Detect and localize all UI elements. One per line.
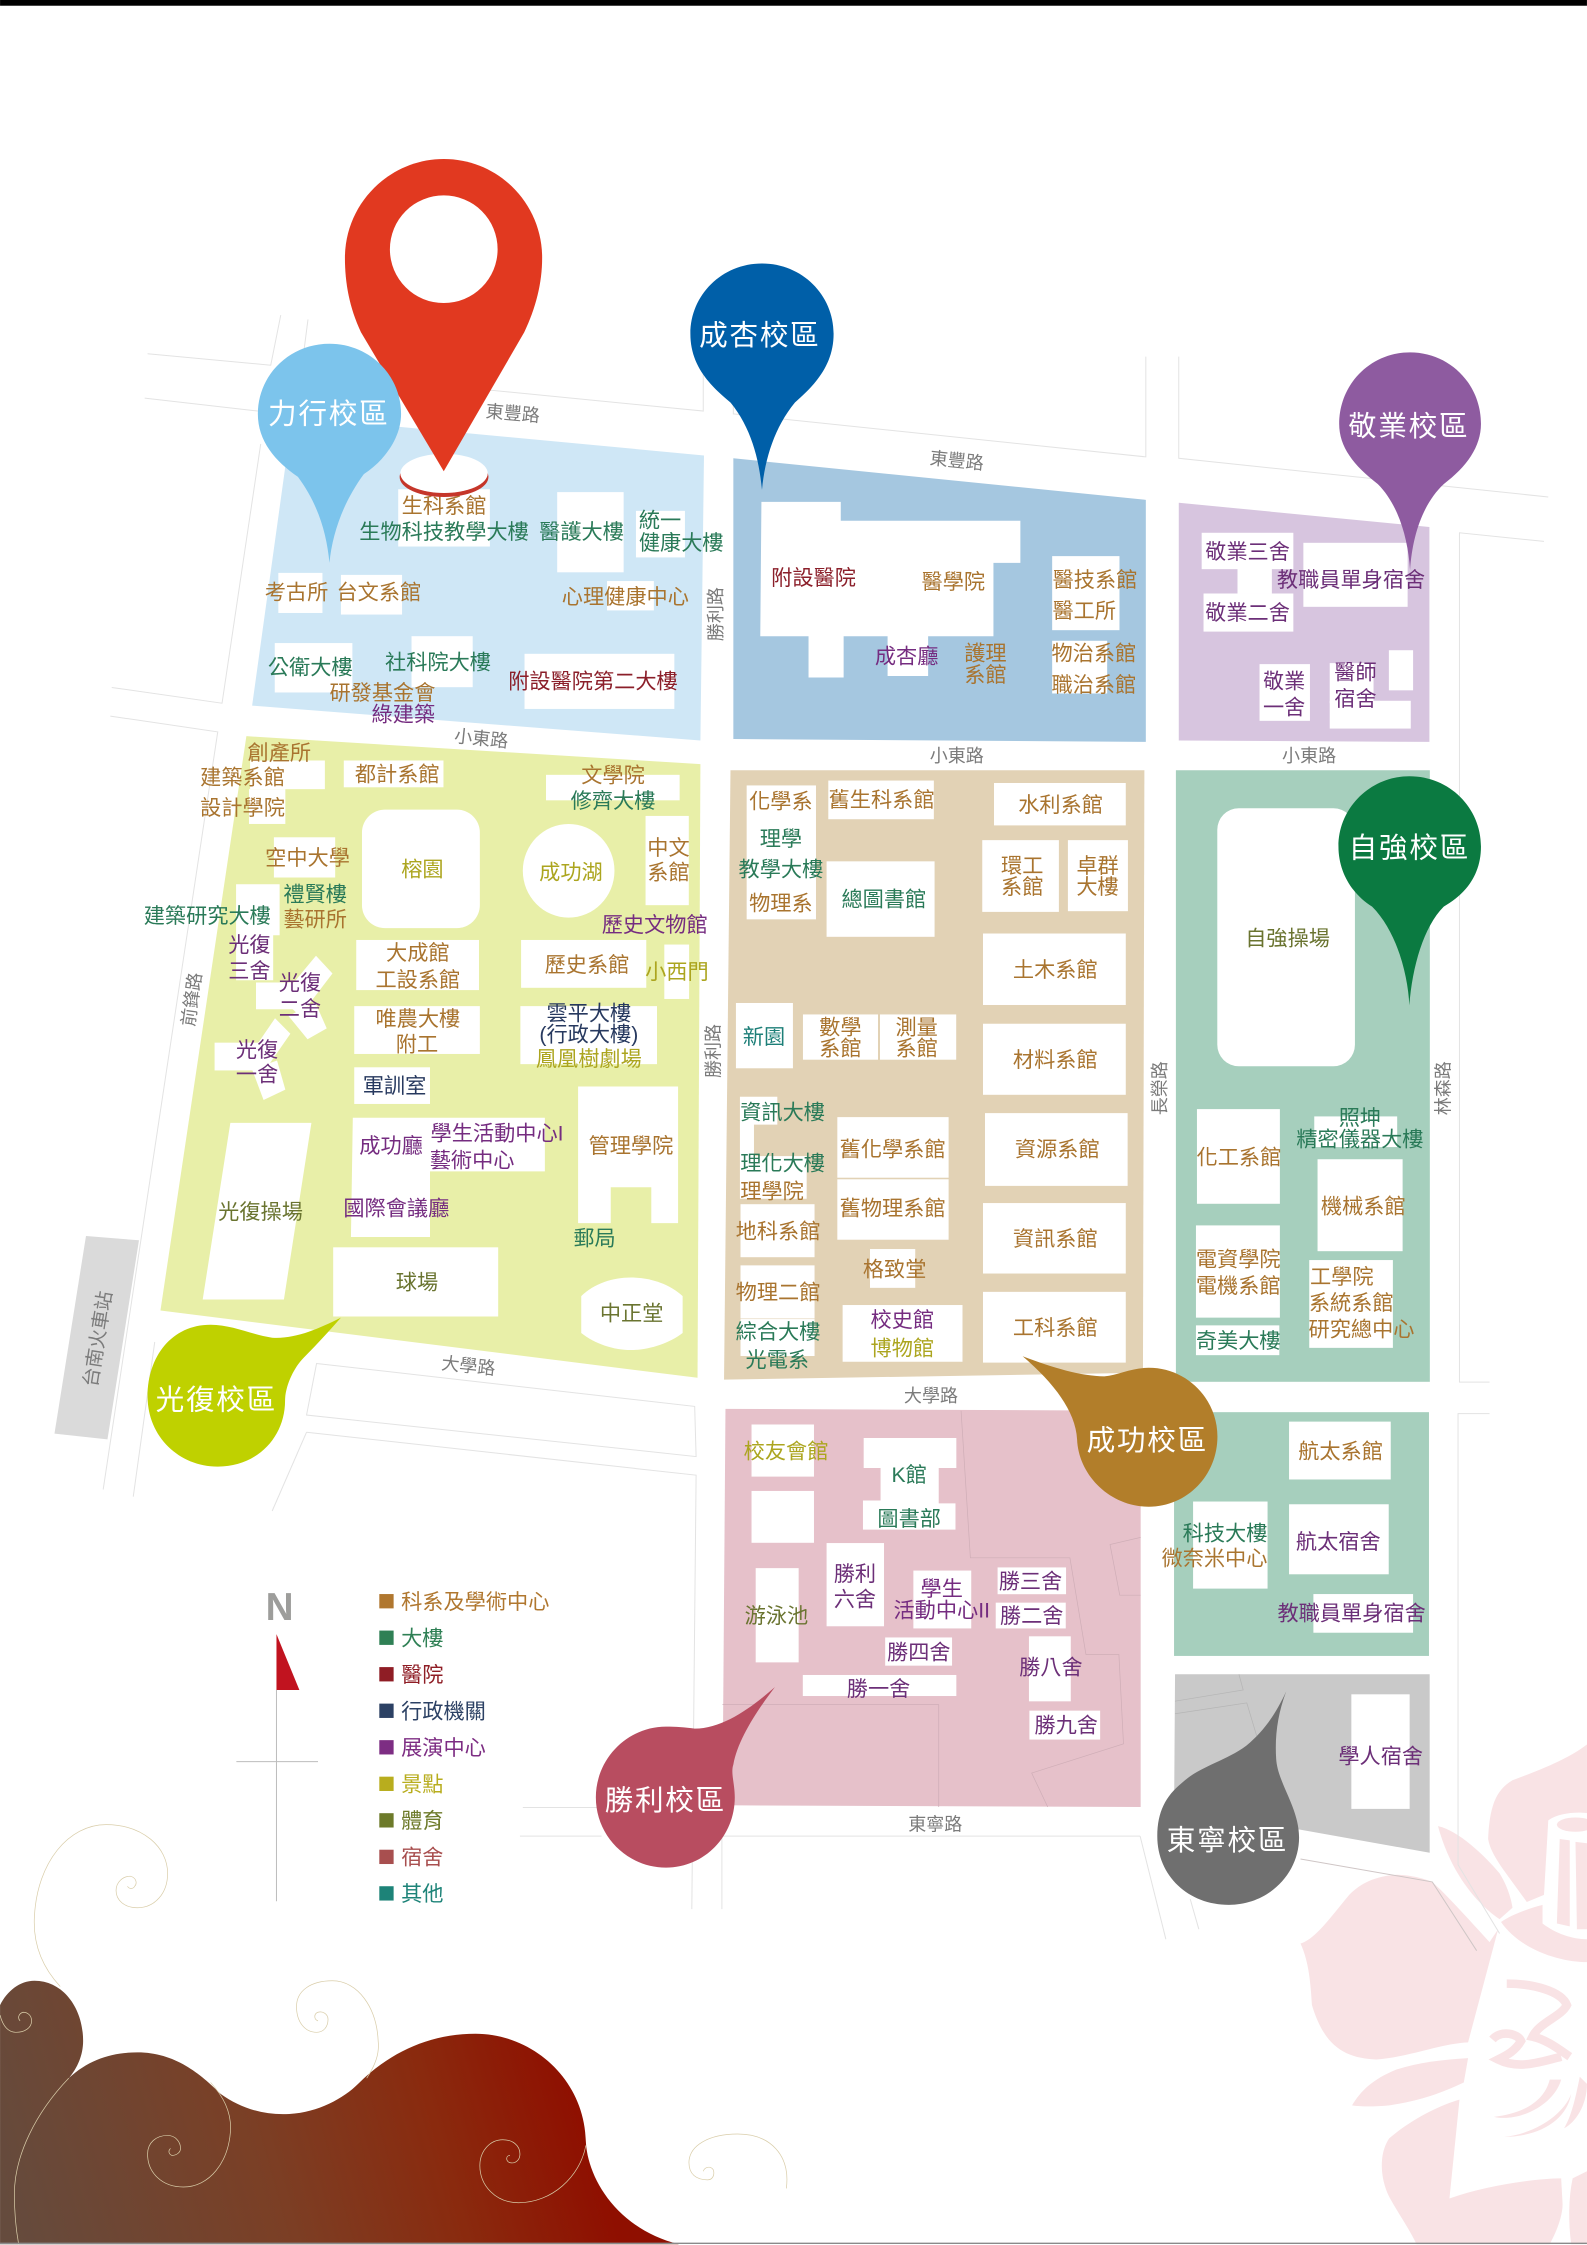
flower watermark bbox=[1301, 1744, 1587, 2244]
road names: 長榮路 bbox=[1150, 1061, 1170, 1115]
labels: 系館 bbox=[895, 1036, 938, 1060]
pin: 自強校區: 自強校區 bbox=[1349, 833, 1470, 865]
buildings bbox=[1193, 1422, 1413, 1633]
labels: 工學院 bbox=[1310, 1265, 1374, 1289]
labels: 材料系館 bbox=[1013, 1048, 1098, 1072]
labels: 醫護大樓 bbox=[539, 520, 624, 544]
labels: 舊化學系館 bbox=[840, 1137, 946, 1161]
road names: 小東路 bbox=[453, 726, 509, 752]
legend: administration: 行政機關 bbox=[401, 1699, 486, 1723]
panel: 自強校區 bbox=[1176, 770, 1430, 1382]
labels: 卓群 bbox=[1076, 854, 1119, 878]
labels: 醫技系館 bbox=[1053, 568, 1137, 592]
legend: scenic bbox=[379, 1772, 443, 1796]
labels: 六舍 bbox=[834, 1587, 876, 1611]
labels: 光電系 bbox=[746, 1348, 809, 1372]
labels: 資訊大樓 bbox=[740, 1101, 825, 1125]
labels: 附設醫院 bbox=[771, 566, 856, 590]
labels: 都計系館 bbox=[355, 763, 440, 787]
labels: 微奈米中心 bbox=[1161, 1546, 1267, 1570]
buildings bbox=[1202, 533, 1413, 729]
road names: 勝利路 bbox=[703, 1024, 723, 1078]
pin: 東寧校區 bbox=[1157, 1691, 1299, 1905]
labels: 系館 bbox=[964, 663, 1007, 687]
labels: 大成館 bbox=[386, 941, 450, 965]
road names: 小東路 bbox=[930, 746, 984, 766]
labels bbox=[1161, 1439, 1426, 1626]
buildings bbox=[1196, 808, 1403, 1355]
labels: 奇美大樓 bbox=[1196, 1329, 1281, 1353]
labels: 唯農大樓 bbox=[375, 1007, 460, 1031]
road names: 林森路 bbox=[1434, 1061, 1454, 1115]
road names: 勝利路 bbox=[706, 587, 726, 641]
panel: 力行校區 bbox=[252, 417, 724, 740]
panel: 勝利校區 bbox=[722, 1409, 1141, 1807]
panel: 成杏校區 bbox=[733, 458, 1146, 742]
labels: 勝一舍 bbox=[847, 1677, 910, 1701]
labels: 物理二館 bbox=[736, 1281, 820, 1305]
labels: 物治系館 bbox=[1051, 642, 1136, 666]
labels: 生科系館 bbox=[402, 494, 486, 518]
labels: 游泳池 bbox=[745, 1604, 808, 1628]
labels bbox=[736, 788, 1119, 1372]
labels: 數學 bbox=[819, 1015, 862, 1039]
labels: 教職員單身宿舍 bbox=[1277, 1602, 1426, 1626]
labels: 附工 bbox=[396, 1033, 438, 1057]
labels: 雲平大樓 bbox=[546, 1002, 631, 1026]
pin: 成功校區: 成功校區 bbox=[1087, 1425, 1208, 1457]
labels: 設計學院 bbox=[200, 796, 285, 820]
labels bbox=[265, 494, 724, 726]
labels: 禮賢樓 bbox=[283, 883, 347, 907]
labels: 測量 bbox=[895, 1015, 938, 1039]
labels: 榕園 bbox=[401, 857, 444, 881]
labels: 機械系館 bbox=[1321, 1195, 1406, 1219]
labels: 土木系館 bbox=[1013, 958, 1098, 982]
labels: 健康大樓 bbox=[639, 531, 724, 555]
road names: 大學路 bbox=[904, 1386, 958, 1406]
labels: 光復 bbox=[236, 1038, 278, 1062]
pin: 勝利校區: 勝利校區 bbox=[605, 1785, 726, 1817]
labels: 醫學院 bbox=[922, 570, 985, 594]
labels: 建築研究大樓 bbox=[144, 904, 271, 928]
labels: 藝研所 bbox=[283, 908, 347, 932]
labels: 勝三舍 bbox=[999, 1570, 1062, 1594]
labels: (行政大樓) bbox=[539, 1022, 638, 1046]
labels: 勝利 bbox=[834, 1562, 876, 1586]
labels: 成功湖 bbox=[539, 860, 603, 884]
labels: 研究總中心 bbox=[1309, 1317, 1414, 1341]
labels: 精密儀器大樓 bbox=[1296, 1128, 1424, 1152]
pin: 成功校區 bbox=[1023, 1356, 1217, 1507]
labels: 勝四舍 bbox=[887, 1640, 951, 1664]
labels: 新園 bbox=[743, 1025, 785, 1049]
labels: 勝二舍 bbox=[1000, 1604, 1063, 1628]
labels: 大樓 bbox=[1076, 875, 1119, 899]
labels: 創產所 bbox=[248, 741, 311, 765]
road names: 東豐路 bbox=[929, 448, 985, 474]
labels: 校友會館 bbox=[744, 1439, 828, 1463]
labels: 建築系館 bbox=[200, 766, 285, 790]
labels: 學生活動中心I bbox=[431, 1122, 564, 1146]
labels: 藝術中心 bbox=[430, 1148, 514, 1172]
legend: departments: 科系及學術中心 bbox=[401, 1590, 549, 1614]
labels: 歷史文物館 bbox=[602, 913, 708, 937]
labels: 活動中心II bbox=[893, 1598, 990, 1622]
road names: 前鋒路 bbox=[178, 971, 206, 1028]
labels: 歷史系館 bbox=[545, 953, 629, 977]
labels: 教學大樓 bbox=[739, 858, 823, 882]
building bbox=[1351, 1694, 1410, 1809]
legend: other: 其他 bbox=[401, 1882, 443, 1906]
labels: 一舍 bbox=[1263, 695, 1305, 719]
labels: 中正堂 bbox=[600, 1302, 663, 1326]
labels: 光復 bbox=[279, 971, 321, 995]
pin: 自強校區 bbox=[1338, 776, 1481, 1005]
legend: sports bbox=[379, 1809, 443, 1833]
road names bbox=[178, 401, 1454, 1834]
panel: 光復校區 bbox=[144, 736, 709, 1378]
labels: 郵局 bbox=[573, 1227, 616, 1251]
labels: 自強操場 bbox=[1245, 926, 1330, 950]
railway station box: 台南火車站 bbox=[80, 1290, 117, 1388]
pin: 光復校區: 光復校區 bbox=[156, 1385, 277, 1417]
road outlines bbox=[103, 315, 1548, 1951]
labels: 二舍 bbox=[279, 997, 321, 1021]
labels: 舊生科系館 bbox=[829, 788, 935, 812]
labels: 成功廳 bbox=[359, 1134, 423, 1158]
labels: 心理健康中心 bbox=[562, 585, 689, 609]
labels: 台文系館 bbox=[336, 581, 421, 605]
labels: 中文 bbox=[647, 836, 690, 860]
labels: 總圖書館 bbox=[841, 888, 926, 912]
labels: 考古所 bbox=[265, 581, 328, 605]
labels: 學生 bbox=[921, 1577, 963, 1601]
labels: 科技大樓 bbox=[1183, 1522, 1267, 1546]
buildings bbox=[760, 502, 1119, 693]
buildings bbox=[275, 489, 685, 709]
labels: 職治系館 bbox=[1051, 673, 1136, 697]
pin: 敬業校區: 敬業校區 bbox=[1348, 411, 1469, 443]
panel: 敬業校區 bbox=[1179, 503, 1429, 742]
labels: 醫師 bbox=[1334, 660, 1377, 684]
labels: 格致堂 bbox=[863, 1258, 926, 1282]
labels: 電資學院 bbox=[1196, 1248, 1281, 1272]
pin: 敬業校區 bbox=[1339, 352, 1481, 570]
labels: 水利系館 bbox=[1018, 793, 1103, 817]
buildings bbox=[752, 1424, 1100, 1740]
pin: 光復校區 bbox=[148, 1318, 341, 1467]
labels: 成杏廳 bbox=[875, 645, 938, 669]
labels: 社科院大樓 bbox=[385, 650, 491, 674]
labels: 資源系館 bbox=[1015, 1138, 1100, 1162]
labels: 博物館 bbox=[871, 1337, 934, 1361]
labels: 生物科技教學大樓 bbox=[359, 520, 529, 544]
swirl decorations bbox=[0, 1825, 787, 2244]
labels: 統一 bbox=[639, 509, 681, 533]
labels: 工科系館 bbox=[1013, 1316, 1098, 1340]
panel: 成功校區 bbox=[724, 770, 1144, 1380]
pin: 力行校區 bbox=[258, 344, 401, 563]
labels: 修齊大樓 bbox=[571, 789, 655, 813]
panel: 自強校區 south block bbox=[1161, 1412, 1429, 1656]
labels: 綠建築 bbox=[372, 702, 435, 726]
labels bbox=[144, 741, 709, 1326]
pin: 勝利校區 bbox=[596, 1687, 775, 1868]
labels: 系統系館 bbox=[1309, 1291, 1394, 1315]
labels: 敬業 bbox=[1263, 670, 1305, 694]
labels: 管理學院 bbox=[589, 1134, 673, 1158]
labels: 研發基金會 bbox=[329, 681, 435, 705]
labels: 化學系 bbox=[749, 790, 813, 814]
labels: 理化大樓 bbox=[740, 1152, 825, 1176]
pin: 成杏校區: 成杏校區 bbox=[699, 320, 821, 352]
road names: 東豐路 bbox=[485, 401, 541, 426]
labels: 醫工所 bbox=[1052, 599, 1116, 623]
labels: 勝八舍 bbox=[1019, 1656, 1083, 1680]
labels: 敬業二舍 bbox=[1205, 601, 1290, 625]
north arrow: N bbox=[266, 1586, 294, 1629]
labels: 工設系館 bbox=[375, 968, 460, 992]
labels: 光復 bbox=[228, 933, 271, 957]
labels bbox=[744, 1439, 1098, 1738]
labels: 國際會議廳 bbox=[343, 1197, 449, 1221]
pin: 東寧校區: 東寧校區 bbox=[1167, 1825, 1288, 1857]
labels: 理學院 bbox=[740, 1179, 804, 1203]
top black bar bbox=[0, 0, 1587, 6]
labels: 三舍 bbox=[228, 959, 271, 983]
legend: buildings bbox=[379, 1626, 443, 1650]
buildings bbox=[736, 781, 1128, 1363]
legend: dormitory bbox=[379, 1846, 443, 1870]
labels: 光復操場 bbox=[218, 1200, 303, 1224]
labels: 球場 bbox=[396, 1270, 438, 1294]
railway station box bbox=[54, 1236, 139, 1439]
labels: 空中大學 bbox=[265, 846, 350, 870]
legend: dormitory: 宿舍 bbox=[401, 1846, 443, 1870]
labels: 勝九舍 bbox=[1034, 1714, 1098, 1738]
labels: 舊物理系館 bbox=[840, 1196, 946, 1220]
bottom wave bbox=[0, 1981, 679, 2244]
labels: 一舍 bbox=[236, 1063, 278, 1087]
labels: 航太宿舍 bbox=[1296, 1530, 1381, 1554]
panel: 東寧校區 bbox=[1174, 1674, 1430, 1853]
labels: 小西門 bbox=[645, 960, 709, 984]
labels: 教職員單身宿舍 bbox=[1277, 568, 1425, 592]
labels: 系館 bbox=[1001, 875, 1043, 899]
legend: other bbox=[379, 1882, 443, 1906]
north arrow bbox=[236, 1586, 318, 1901]
main location pin bbox=[345, 159, 542, 497]
labels: K館 bbox=[892, 1463, 927, 1487]
labels: 軍訓室 bbox=[363, 1074, 426, 1098]
labels: 理學 bbox=[760, 827, 802, 851]
legend: buildings: 大樓 bbox=[401, 1626, 443, 1650]
labels: 航太系館 bbox=[1298, 1439, 1383, 1463]
labels: 敬業三舍 bbox=[1205, 540, 1290, 564]
labels: 物理系 bbox=[749, 892, 813, 916]
labels: 地科系館 bbox=[736, 1219, 820, 1243]
labels bbox=[771, 566, 1137, 697]
legend bbox=[379, 1590, 549, 1906]
buildings bbox=[203, 761, 689, 1350]
pin: 成杏校區 bbox=[690, 264, 834, 490]
labels: 系館 bbox=[647, 860, 690, 884]
label: 學人宿舍 bbox=[1338, 1745, 1423, 1769]
road names: 小東路 bbox=[1282, 746, 1336, 766]
labels: 宿舍 bbox=[1334, 687, 1377, 711]
labels: 系館 bbox=[819, 1036, 862, 1060]
labels: 圖書部 bbox=[877, 1507, 941, 1531]
legend: exhibition: 展演中心 bbox=[401, 1736, 486, 1760]
legend: hospital bbox=[379, 1663, 443, 1687]
legend: hospital: 醫院 bbox=[401, 1663, 443, 1687]
labels: 護理 bbox=[964, 642, 1007, 666]
labels: 鳳凰樹劇場 bbox=[536, 1047, 642, 1071]
labels: 照坤 bbox=[1339, 1106, 1381, 1130]
labels: 資訊系館 bbox=[1013, 1227, 1098, 1251]
road names: 東寧路 bbox=[908, 1814, 962, 1834]
labels: 公衛大樓 bbox=[268, 655, 353, 679]
road names: 大學路 bbox=[440, 1353, 496, 1379]
labels: 校史館 bbox=[871, 1308, 934, 1332]
labels: 綜合大樓 bbox=[736, 1320, 820, 1344]
labels: 化工系館 bbox=[1197, 1145, 1281, 1169]
labels: 附設醫院第二大樓 bbox=[508, 670, 678, 694]
legend: scenic: 景點 bbox=[401, 1772, 443, 1796]
labels: 電機系館 bbox=[1196, 1274, 1281, 1298]
labels: 文學院 bbox=[581, 763, 645, 787]
labels bbox=[1196, 926, 1424, 1353]
legend: sports: 體育 bbox=[401, 1809, 443, 1833]
pin: 力行校區: 力行校區 bbox=[268, 399, 389, 431]
labels bbox=[1205, 540, 1425, 719]
labels: 環工 bbox=[1001, 855, 1043, 878]
